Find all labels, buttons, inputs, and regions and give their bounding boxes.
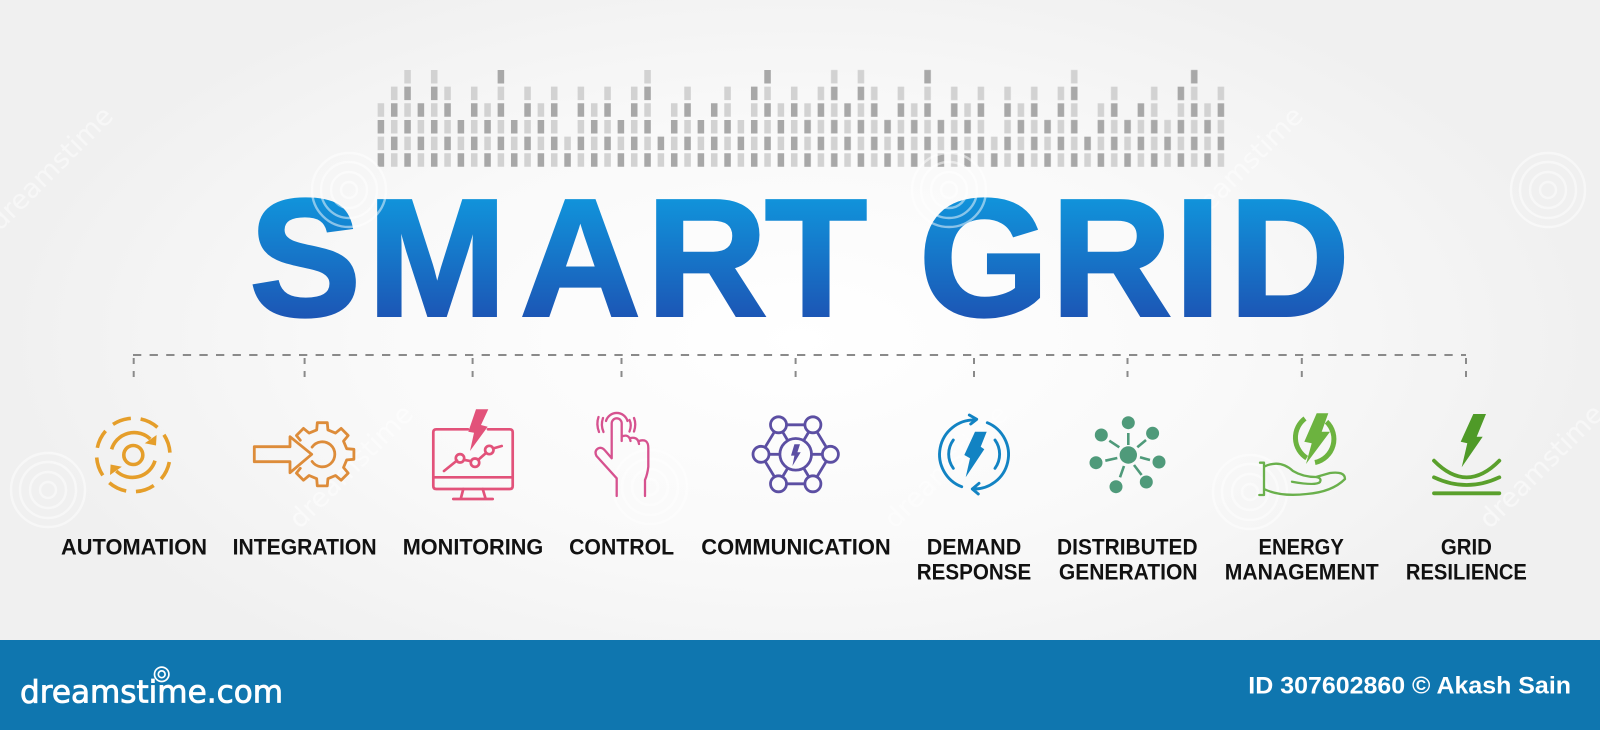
item: distributed generation (1057, 416, 1198, 584)
item: demand response (917, 415, 1031, 584)
item: communication (701, 417, 891, 559)
label: communication: COMMUNICATION (701, 534, 891, 559)
label: demand response (917, 534, 1031, 584)
footer credit: ID 307602860 © Akash Sain (1248, 672, 1571, 699)
item: integration (233, 423, 377, 559)
label: grid resilience (1406, 534, 1527, 584)
item: energy management (1225, 413, 1379, 584)
connector: dashed tree linking title to the nine items (133, 355, 1466, 378)
watermark spirals (11, 153, 1585, 529)
label: grid resilience: RESILIENCE (1406, 559, 1527, 584)
footer bar (0, 640, 1600, 730)
label: demand response: RESPONSE (917, 559, 1031, 584)
icon: bolt striking bending layers (1434, 414, 1499, 493)
label: energy management (1225, 534, 1379, 584)
label: distributed generation: GENERATION (1059, 559, 1198, 584)
label: grid resilience: GRID (1441, 534, 1492, 559)
bar pattern: grid signal equalizer (381, 70, 1221, 167)
label: distributed generation (1057, 534, 1198, 584)
icon: hexagon network with bolt (753, 417, 838, 492)
watermark text: dreamstime (878, 398, 1015, 535)
watermark text: dreamstime (283, 398, 420, 535)
label: integration: INTEGRATION (233, 534, 377, 559)
label: automation: AUTOMATION (61, 534, 207, 559)
watermark text (0, 100, 1600, 535)
watermark text: dreamstime (1173, 100, 1310, 237)
item: monitoring (403, 409, 543, 559)
icon: hand holding energy bolt (1259, 413, 1345, 495)
label: monitoring: MONITORING (403, 534, 543, 559)
title: SMART GRID (250, 166, 1350, 352)
icon: automation gears cycle (90, 412, 176, 498)
label: distributed generation: DISTRIBUTED (1057, 534, 1198, 559)
label: energy management: MANAGEMENT (1225, 559, 1379, 584)
item: automation (61, 412, 207, 559)
icon: monitor with chart and bolt (433, 409, 513, 499)
icon: cycle arrows around bolt (940, 415, 1009, 494)
label: demand response: DEMAND (927, 534, 1021, 559)
label: control: CONTROL (569, 534, 674, 559)
item: grid resilience (1406, 414, 1527, 584)
icon: arrow entering gear (254, 423, 354, 486)
label: energy management: ENERGY (1259, 534, 1344, 559)
icon: hand tapping (596, 413, 648, 496)
footer logo: dreamstime.com: dreamstime.com (20, 675, 283, 711)
item: control (569, 413, 674, 559)
icon: hub and spoke nodes (1090, 416, 1166, 493)
